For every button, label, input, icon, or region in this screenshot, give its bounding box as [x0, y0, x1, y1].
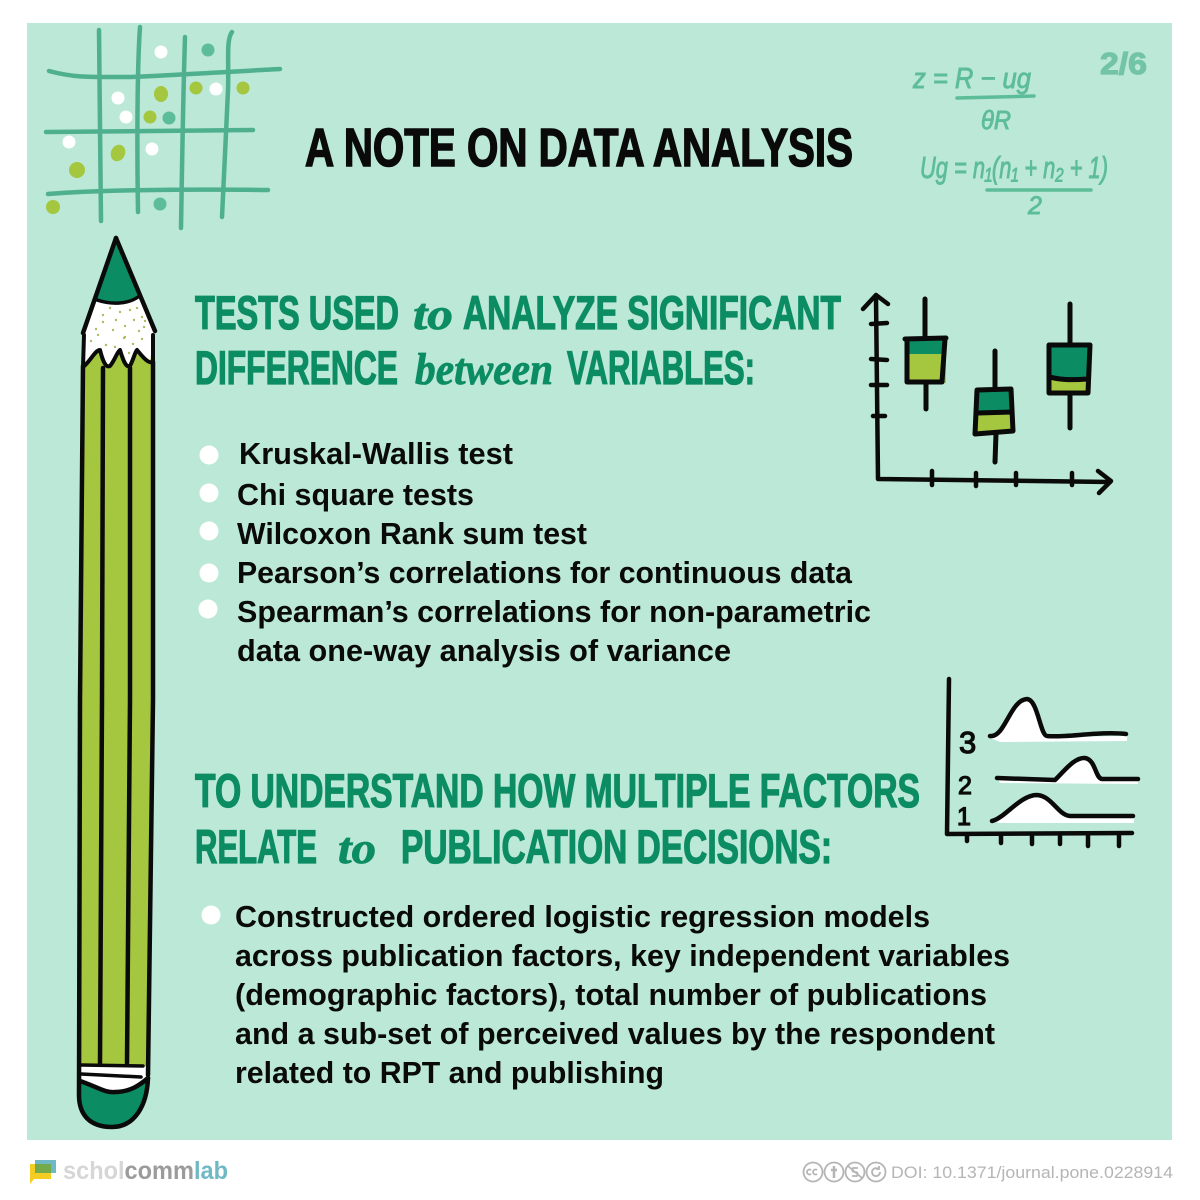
box 2: [975, 351, 1013, 462]
bullet list: regression: Constructed ordered logistic regression models: [235, 899, 930, 934]
axis labels: 3: [959, 725, 976, 760]
heading: multiple factors: to: [338, 824, 376, 873]
heading: multiple factors: PUBLICATION DECISIONS:: [401, 820, 832, 873]
formulas: z = R − ug: [912, 63, 1031, 95]
pencil lead: [95, 242, 140, 304]
logo: scholcommlab: scholcommlab: [63, 1157, 228, 1185]
curves: [990, 699, 1126, 736]
curve fills: [990, 699, 1127, 742]
heading: tests used: TESTS USED: [195, 286, 399, 339]
bullet list: regression: related to RPT and publishing: [235, 1055, 664, 1090]
heading: multiple factors: RELATE: [195, 820, 317, 873]
heading: tests used: to: [413, 290, 453, 339]
heading: multiple factors: TO UNDERSTAND HOW MULTIPLE FACTORS: [195, 764, 920, 817]
bullet list: regression: and a sub-set of perceived values by the respondent: [235, 1016, 995, 1051]
bullet list: tests: Pearson’s correlations for continuous data: [237, 555, 853, 590]
formulas: θR: [981, 105, 1011, 135]
box plot chart: [863, 295, 1111, 493]
bullet list: tests: [198, 436, 871, 668]
ridgeline chart: [947, 679, 1138, 846]
formulas: Ug = n₁(n₁ + n₂ + 1): [920, 150, 1108, 185]
axes: [947, 679, 1132, 834]
pencil wood: [83, 240, 155, 367]
heading: tests used: [195, 286, 841, 394]
bullet list: regression: across publication factors, key independent variables: [235, 938, 1010, 973]
ridgeline chart: 1: [957, 803, 971, 831]
eraser: [79, 1078, 148, 1127]
heading: tests used: DIFFERENCE: [195, 341, 398, 394]
bullet list: tests: Chi square tests: [237, 477, 474, 512]
bullet list: regression: (demographic factors), total number of publications: [235, 977, 987, 1012]
heading: tests used: between: [415, 345, 553, 394]
bullet list: regression: [202, 899, 1010, 1090]
pencil body: [80, 345, 152, 1066]
icon: scatter grid: [46, 27, 280, 228]
heading: tests used: VARIABLES:: [567, 341, 755, 394]
ridgeline chart: 2: [958, 772, 972, 800]
heading: multiple factors: [195, 764, 920, 873]
axes: [863, 295, 1111, 493]
DOI text: DOI: 10.1371/journal.pone.0228914: [891, 1163, 1173, 1182]
box 3: [1049, 304, 1090, 428]
icon: speech bubbles: [30, 1160, 56, 1184]
bullet list: tests: Spearman’s correlations for non-parametric: [237, 594, 871, 629]
heading: tests used: ANALYZE SIGNIFICANT: [463, 286, 841, 339]
bullet list: tests: Wilcoxon Rank sum test: [237, 516, 587, 551]
box 1: [905, 299, 946, 409]
bullet list: tests: data one-way analysis of variance: [237, 633, 731, 668]
ferrule: [81, 1066, 148, 1093]
formulas: [912, 63, 1108, 220]
page number: 2/6: [1100, 46, 1147, 81]
icon: pencil: [79, 238, 155, 1127]
formulas: 2: [1027, 192, 1042, 220]
license icons: [804, 1162, 886, 1182]
title: A NOTE ON DATA ANALYSIS: [305, 118, 853, 178]
bullet list: tests: Kruskal-Wallis test: [239, 436, 513, 471]
